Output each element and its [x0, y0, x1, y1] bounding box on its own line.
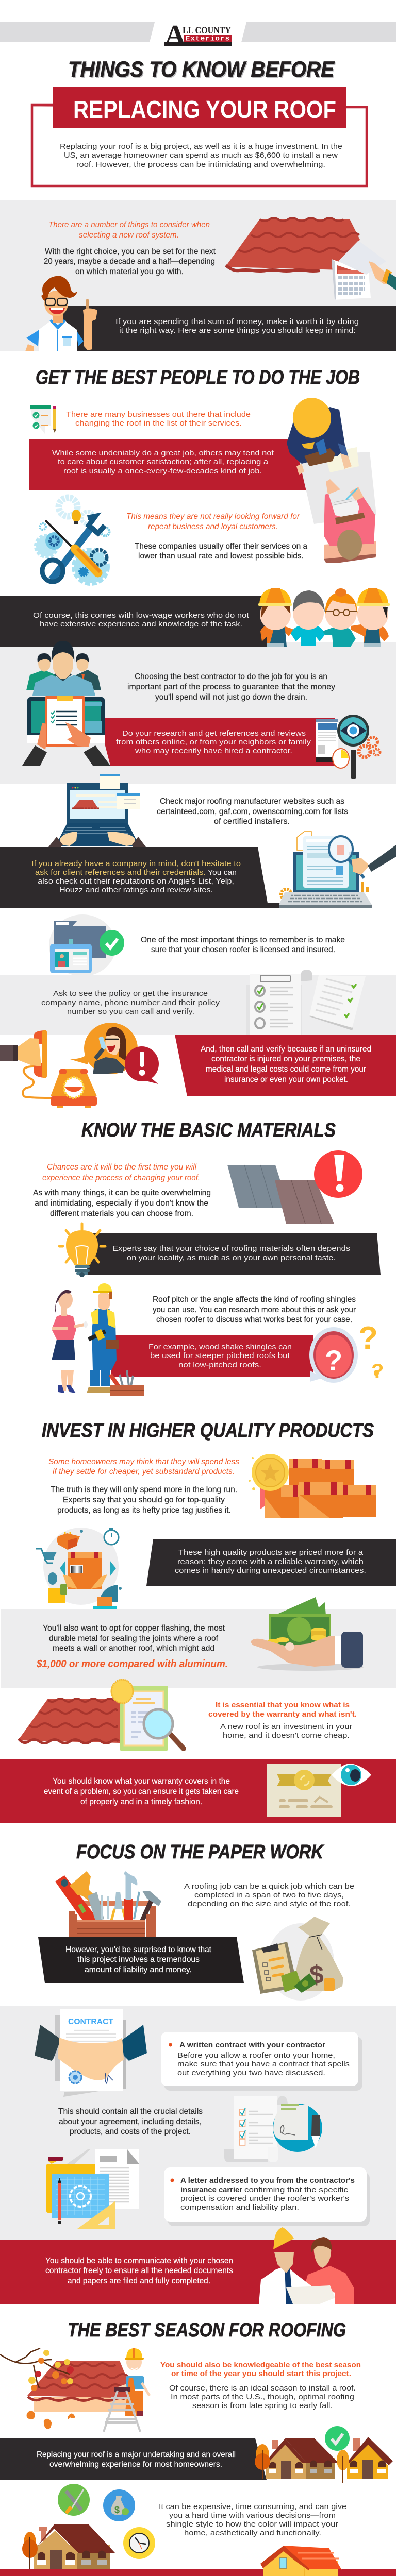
text: wood shake — [148, 1343, 292, 1369]
card: insurance letter: project is covered under the roofer's worker's — [180, 2194, 349, 2203]
text: experts say: on your locality, as much as on your own personal taste. — [127, 1253, 336, 1262]
panel: gray research section — [0, 642, 396, 784]
text: research and references: from others online, or from your neighbors or family — [116, 738, 311, 747]
text: major undertaking — [37, 2450, 236, 2469]
panel: red band communicate — [0, 2240, 396, 2304]
text: major undertaking: overwhelming experience for most homeowners. — [50, 2460, 222, 2469]
text: many businesses: changing the roof in the list of their services. — [75, 419, 242, 428]
text: uninsured contractor: medical and legal costs could come from your — [206, 1065, 367, 1074]
text: high quality products: comes in handy during unexpected circumstances. — [175, 1566, 366, 1575]
panel: dark band spending — [63, 306, 396, 351]
logo: All County Exteriors — [164, 20, 232, 52]
text: wood shake: be used for steeper pitched roofs but — [150, 1351, 290, 1360]
text: copper flashing — [36, 1624, 228, 1670]
text: chances are — [33, 1163, 211, 1218]
text: uninsured contractor — [201, 1045, 371, 1084]
card: insurance letter — [164, 2167, 370, 2226]
text: many businesses — [66, 410, 251, 428]
panel: gray policy band — [0, 975, 396, 1035]
card: written contract — [161, 2032, 362, 2091]
text: warranty problem: You should know what your warranty covers in the — [53, 1777, 230, 1786]
illustration: man with glasses — [25, 276, 97, 351]
panel: dark band experts — [87, 1233, 381, 1275]
illustration: contract with handshake — [35, 2009, 147, 2097]
text: best season: or time of the year you should start this project. — [171, 2369, 351, 2378]
text: communicate: You should be able to communicate with your chosen — [45, 2257, 233, 2265]
text: low-wage workers: have extensive experience and knowledge of the task. — [40, 620, 242, 629]
icon: question mark bubble: ? — [325, 1344, 342, 1377]
illustration: toolbox — [55, 1871, 161, 1937]
text: quick job — [184, 1882, 354, 1908]
text: quick job: depending on the size and style of the roof. — [188, 1900, 351, 1908]
text: client references: ask for client references and their credentials. — [35, 868, 206, 877]
card: written contract: Before you allow a roofer onto your home, — [177, 2051, 335, 2060]
text: expensive decisions: It can be expensive, time consuming, and can give — [159, 2502, 346, 2511]
text: cheaper products: The truth is they will only spend more in the long run. — [51, 1485, 237, 1494]
text: quick job: A roofing job can be a quick job which can be — [184, 1882, 354, 1891]
text: liability and money — [65, 1945, 212, 1974]
illustration: certificate with eye — [267, 1764, 371, 1817]
text: roof pitch: chosen roofer to discuss what works best for your case. — [156, 1315, 352, 1324]
text: experts say: Experts say that your choice of roofing materials often depends — [112, 1244, 350, 1253]
text: not really looking forward: This means they are not really looking forward for — [126, 512, 300, 521]
illustration: money bag and clipboard — [252, 1917, 343, 2001]
illustration: monitor, clipboard, hands — [22, 696, 110, 766]
text: quick job: completed in a span of two to five days, — [194, 1891, 344, 1900]
card: insurance letter: insurance carrier — [180, 2185, 242, 2194]
panel: dark box liability — [38, 1937, 244, 1983]
card: insurance letter: compensation and liability plan. — [180, 2203, 299, 2212]
text: research and references: Do your research and get references and reviews — [122, 729, 306, 738]
text: uninsured contractor: insurance or even your own pocket. — [224, 1075, 348, 1084]
text: customer satisfaction — [52, 449, 274, 476]
illustration: brown house with tree — [22, 2524, 115, 2569]
text: communicate: contractor freely to ensure all the needed documents — [45, 2266, 233, 2275]
text: low-wage workers: Of course, this comes with low-wage workers who do not — [33, 611, 250, 620]
text: copper flashing: meets a wall or another roof, which might add — [53, 1644, 214, 1653]
icon: checklist and pencil — [30, 405, 56, 434]
text: choosing the best contractor: Choosing the best contractor to do the job for you is an — [135, 672, 327, 681]
text: choosing the best contractor — [127, 672, 335, 702]
text: licensed and insured: One of the most important things to remember is to make — [141, 936, 345, 944]
text: things to consider: With the right choice, you can be set for the next — [45, 247, 216, 256]
text: warranty coverage: A new roof is an investment in your — [220, 1722, 352, 1731]
text: licensed and insured — [141, 936, 345, 954]
illustration: magnifier, browser page, gears, stopwatch — [316, 715, 380, 779]
panel: dark band low-wage workers — [0, 596, 269, 647]
text: experts say — [112, 1244, 350, 1262]
text: warranty problem — [44, 1777, 239, 1806]
illustration: hands holding yellow house — [249, 2546, 353, 2576]
text: manufacturer websites: of certified installers. — [214, 817, 290, 826]
text: liability and money: amount of liability and money. — [85, 1965, 192, 1974]
text: client references: If you already have a company in mind, don't hesitate to — [31, 859, 241, 868]
panel: red box wood shake — [111, 1335, 313, 1377]
text: things to consider: 20 years, maybe a decade and a half—depending — [44, 257, 215, 266]
text: wood shake: not low-pitched roofs. — [178, 1361, 261, 1369]
illustration: laptop with magnifier — [279, 832, 396, 908]
illustration: contract with handshake: CONTRACT — [68, 2018, 113, 2026]
logo: All County Exteriors: Exteriors — [186, 35, 229, 43]
icon: question mark bubble: ? — [371, 1360, 384, 1383]
text: customer satisfaction: to care about customer satisfaction; after all, replacing a — [58, 457, 269, 466]
illustration: two houses and check mark — [255, 2426, 393, 2483]
panel: intro gray — [0, 200, 396, 351]
text: research and references: who may recently have hired a contractor. — [135, 747, 292, 755]
text: roof pitch: you can use. You can research more about this or ask your — [153, 1306, 356, 1314]
text: research and references — [116, 729, 311, 755]
illustration: money bag and clipboard: $ — [309, 1960, 324, 1989]
text: chances are: experience the process of changing your roof. — [42, 1174, 200, 1182]
text: licensed and insured: sure that your chosen roofer is licensed and insured. — [151, 945, 335, 954]
panel: red band roof protects — [0, 2569, 396, 2576]
text: spending: it the right way. Here are some things you should keep in mind: — [119, 326, 356, 335]
text: liability and money: this project involves a tremendous — [77, 1955, 200, 1964]
text: low-wage workers — [33, 611, 250, 629]
illustration: folder and blueprint — [46, 2149, 139, 2229]
heading: the best season: THE BEST SEASON FOR ROOFING — [68, 2319, 346, 2341]
illustration: medal and boxes — [249, 1454, 376, 1518]
panel: red box research — [98, 718, 335, 766]
text: high quality products: These high quality products are priced more for a — [178, 1548, 364, 1557]
illustration: contractor and homeowner with plans — [259, 2227, 354, 2304]
icon: light bulb — [59, 1224, 105, 1277]
illustration: roofing samples with alert — [227, 1150, 362, 1224]
text: choosing the best contractor: important part of the process to guarantee that the money — [127, 683, 335, 691]
illustration: autumn roof and worker — [0, 2348, 150, 2432]
text: copper flashing: durable metal for sealing the joints where a roof — [49, 1634, 219, 1643]
text: things to consider — [44, 221, 216, 276]
panel: red box customer satisfaction — [29, 439, 307, 490]
text: not really looking forward — [126, 512, 307, 561]
illustration: signed checklist scroll — [224, 2096, 322, 2162]
title: THINGS TO KNOW BEFORE — [68, 57, 335, 82]
card: written contract: make sure that you have a contract that spells — [177, 2060, 350, 2069]
illustration: license folder and ID badge — [49, 914, 124, 976]
text: copper flashing: $1,000 or more compared with aluminum. — [36, 1658, 228, 1670]
text: warranty problem: of properly and in a timely fashion. — [80, 1798, 202, 1806]
text: ask to see the policy: number so you can call and verify. — [67, 1007, 194, 1016]
text: warranty coverage: covered by the warranty and what isn't. — [208, 1710, 357, 1719]
text: client references — [31, 859, 241, 894]
text: not really looking forward: These companies usually offer their services on a — [135, 542, 307, 551]
panel: dark band major undertaking — [0, 2438, 267, 2480]
logo: All County Exteriors: LL COUNTY — [183, 25, 231, 36]
text: client references: You can — [208, 868, 237, 877]
text: high quality products — [175, 1548, 366, 1575]
panel: gray copper flashing — [1, 1609, 396, 1688]
icon: question mark bubble: ? — [358, 1320, 378, 1356]
text: crucial details: about your agreement, including details, — [59, 2117, 202, 2126]
text: customer satisfaction: While some undeniably do a great job, others may tend not — [52, 449, 274, 457]
text: customer satisfaction: roof is usually a once-every-few-decades kind of job. — [63, 467, 262, 476]
text: things to consider: selecting a new roof system. — [79, 231, 179, 240]
intro paragraph: Replacing your roof is a big project, as well as it is a huge investment. In the — [60, 142, 342, 151]
text: roof pitch: Roof pitch or the angle affects the kind of roofing shingles — [153, 1295, 356, 1304]
illustration: hand holding money — [251, 1597, 364, 1671]
text: crucial details: products, and costs of the project. — [70, 2127, 191, 2136]
illustration: homeowner and roofer with toolbox — [52, 1283, 144, 1396]
text: best season: season is from late spring to early fall. — [192, 2401, 333, 2410]
illustration: laptop with roof on screen — [48, 774, 146, 847]
text: liability and money: However, you'd be surprised to know that — [65, 1945, 212, 1954]
text: cheaper products: Experts say that you should go for top-quality — [63, 1496, 225, 1504]
subtitle banner: replacing your roof — [53, 87, 346, 128]
text: ask to see the policy — [41, 989, 220, 1016]
text: ask to see the policy: company name, phone number and their policy — [41, 998, 220, 1007]
card: written contract: out everything you two have discussed. — [177, 2069, 325, 2077]
text: many businesses: There are many businesses out there that include — [66, 410, 251, 419]
heading: know the basic materials: KNOW THE BASIC MATERIALS — [81, 1120, 336, 1141]
text: wood shake: For example, wood shake shingles can — [148, 1343, 292, 1351]
text: communicate: and papers are filed and fully completed. — [68, 2277, 210, 2285]
text: client references: also check out their reputations on Angie's List, Yelp, — [38, 877, 234, 886]
panel: gray paper work — [0, 2006, 396, 2240]
text: uninsured contractor: And, then call and verify because if an uninsured — [201, 1045, 371, 1054]
card: insurance letter: A letter addressed to you from the contractor's — [180, 2176, 355, 2185]
text: best season — [160, 2361, 361, 2410]
icons: tools, money and clock circles — [58, 2484, 155, 2559]
icon: question mark bubble — [309, 1320, 384, 1383]
text: expensive decisions — [159, 2502, 346, 2537]
text: ask to see the policy: Ask to see the policy or get the insurance — [53, 989, 208, 998]
text: crucial details: This should contain all the crucial details — [58, 2107, 203, 2116]
text: best season: In most parts of the U.S., though, optimal roofing — [171, 2393, 354, 2401]
heading: focus on the paper work: FOCUS ON THE PAPER WORK — [76, 1841, 324, 1863]
text: chances are: different materials you can choose from. — [50, 1209, 193, 1218]
text: client references: Houzz and other ratings and review sites. — [59, 886, 213, 894]
text: best season: You should also be knowledgeable of the best season — [160, 2361, 361, 2369]
icon: roof with calendar and hand — [225, 218, 396, 300]
text: crucial details — [58, 2107, 203, 2136]
illustration: checklist documents — [246, 970, 366, 1035]
card: written contract: A written contract with your contractor — [179, 2041, 325, 2049]
text: communicate — [45, 2257, 233, 2285]
text: copper flashing: You'll also want to opt for copper flashing, the most — [43, 1624, 225, 1633]
text: uninsured contractor: contractor is injured on your premises, the — [211, 1055, 360, 1063]
header band — [0, 22, 396, 42]
text: manufacturer websites: Check major roofing manufacturer websites such as — [160, 797, 344, 806]
text: warranty coverage — [208, 1701, 357, 1740]
illustration: four workers — [258, 588, 390, 647]
illustration: three contractors — [26, 641, 101, 696]
text: chances are: Chances are it will be the first time you will — [47, 1163, 196, 1172]
icons: tools, money and clock circles: $ — [114, 2505, 120, 2515]
text: expensive decisions: you a hard time with various decisions—from — [169, 2511, 336, 2520]
text: cheaper products: Some homeowners may think that they will spend less — [48, 1458, 239, 1466]
text: expensive decisions: shingle style to how the color will impact your — [166, 2520, 338, 2529]
illustration: contractor and client at table — [287, 395, 376, 563]
text: spending — [116, 317, 359, 335]
text: spending: If you are spending that sum of money, make it worth it by doing — [116, 317, 359, 326]
text: warranty coverage: It is essential that you know what is — [216, 1701, 350, 1709]
text: cheaper products: if they settle for cheaper, yet substandard products. — [53, 1467, 235, 1476]
intro frame — [32, 105, 367, 186]
text: not really looking forward: lower than usual rate and lowest possible bids. — [138, 552, 304, 561]
icon: gears, wrench, screwdriver and bulb — [36, 498, 109, 583]
title: THINGS TO KNOW BEFORE — [69, 58, 336, 83]
text: things to consider: There are a number of things to consider when — [48, 221, 210, 229]
illustration: logistics circle with parcel — [36, 1528, 122, 1609]
panel: dark band warranty — [146, 1539, 396, 1586]
illustration: roof with warranty certificate — [18, 1680, 184, 1751]
text: manufacturer websites — [157, 797, 348, 826]
panel: dark band client references — [0, 847, 281, 908]
text: warranty problem: event of a problem, so you can ensure it gets taken care — [44, 1787, 239, 1796]
text: choosing the best contractor: you'll spend will not just go down the drain. — [155, 693, 307, 702]
text: major undertaking: Replacing your roof is a major undertaking and an overall — [37, 2450, 236, 2459]
intro paragraph: roof. However, the process can be intimidating and overwhelming. — [76, 160, 325, 169]
illustration: telephone, hand, caller, alert — [0, 1023, 159, 1108]
text: cheaper products — [48, 1458, 239, 1515]
panel: red band warranty — [0, 1759, 396, 1823]
text: roof pitch — [153, 1295, 356, 1324]
text: warranty coverage: home, and it doesn't come cheap. — [223, 1731, 350, 1740]
intro paragraph — [60, 142, 342, 169]
text: not really looking forward: repeat business and loyal customers. — [148, 522, 278, 531]
text: cheaper products: products, as long as its hefty price tag justifies it. — [57, 1506, 231, 1515]
text: best season: Of course, there is an ideal season to install a roof. — [169, 2384, 356, 2393]
intro paragraph: US, an average homeowner can spend as much as $6,600 to install a new — [64, 151, 338, 160]
card: insurance letter: confirming that the specific — [244, 2185, 349, 2194]
text: high quality products: reason: they come with a reliable warranty, which — [177, 1557, 364, 1566]
logo: All County Exteriors: A — [164, 20, 186, 52]
panel: red box uninsured contractor — [175, 1035, 396, 1096]
text: things to consider: on which material you go with. — [75, 267, 184, 276]
subtitle banner: replacing your roof: REPLACING YOUR ROOF — [73, 96, 336, 124]
text: chances are: As with many things, it can be quite overwhelming — [33, 1189, 211, 1197]
text: manufacturer websites: certainteed.com, gaf.com, owenscorning.com for lists — [157, 807, 348, 816]
text: expensive decisions: home, aesthetically and functionally. — [184, 2529, 321, 2537]
text: chances are: and intimidating, especially if you don't know the — [35, 1199, 208, 1208]
